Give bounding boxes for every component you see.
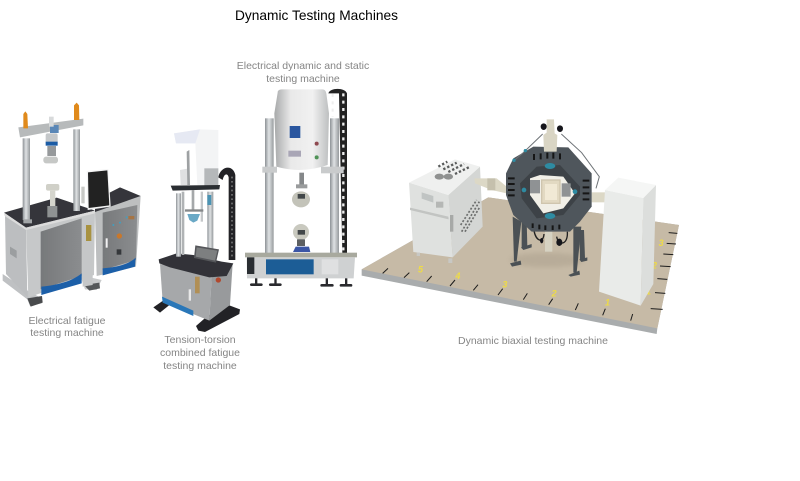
floor plate: 4 [454, 271, 460, 281]
caption: electrical fatigue: Electrical fatigue [28, 315, 106, 327]
floor plate: 2 [651, 260, 657, 270]
legs [510, 217, 587, 277]
title: Dynamic Testing Machines [235, 7, 398, 23]
horizontal actuators [474, 178, 608, 202]
floor plate: 1 [605, 298, 610, 308]
caption: electrical dynamic and static: Electrical dynamic and static [237, 60, 369, 72]
machine: electrical dynamic and static testing machine [245, 89, 357, 287]
caption: dynamic biaxial: Dynamic biaxial testing machine [458, 335, 608, 347]
floor plate: 5 [418, 264, 424, 274]
floor plate: 1 [646, 286, 651, 296]
machine: tension-torsion combined fatigue testing machine [153, 129, 240, 332]
control cabinet [409, 159, 483, 263]
machine: electrical fatigue testing machine [3, 103, 141, 307]
floor shadow [510, 253, 583, 267]
octagonal ring [506, 147, 592, 232]
caption: tension-torsion: combined fatigue [160, 347, 240, 359]
machine: dynamic biaxial testing machine [362, 119, 679, 334]
floor plate: 3 [659, 238, 664, 248]
caption: electrical fatigue: testing machine [30, 327, 104, 339]
lower actuator and cables [534, 230, 567, 252]
floor plate: 2 [551, 289, 557, 299]
caption: tension-torsion: testing machine [163, 360, 237, 372]
caption: electrical dynamic and static: testing machine [266, 73, 340, 85]
top actuator [512, 119, 599, 188]
floor plate: 3 [502, 279, 507, 289]
caption: tension-torsion: Tension-torsion [164, 334, 236, 346]
floor plate [362, 197, 679, 334]
electrical cabinet [599, 178, 656, 306]
